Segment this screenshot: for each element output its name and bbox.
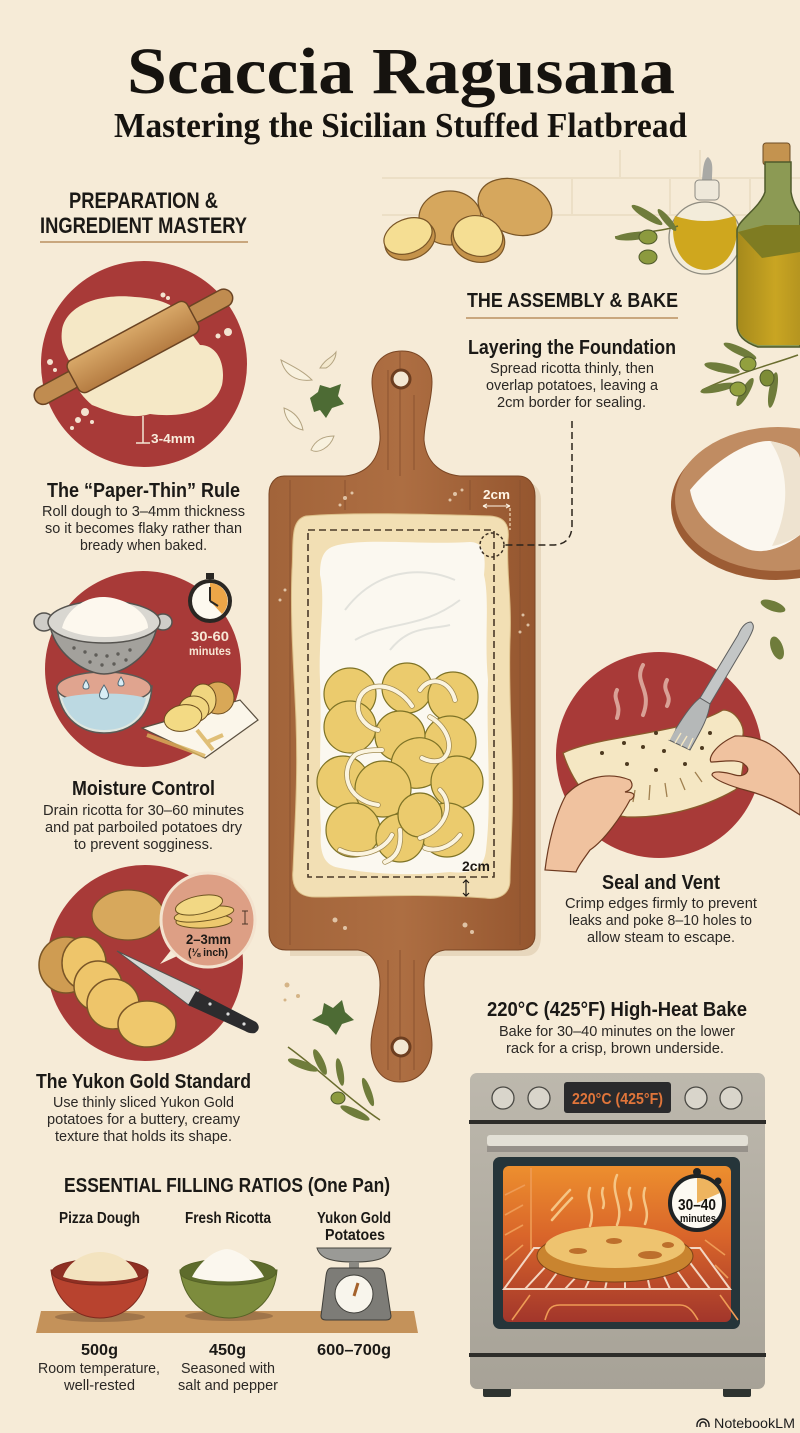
text block: yukon gold standard: Use thinly sliced Yukon Gold [53,1095,234,1111]
icon: parsley and olive sprig [284,982,380,1123]
icon: colander with ricotta [34,597,172,674]
column: pizza dough: Room temperature, [38,1361,160,1377]
icon: fallen leaves [759,597,787,661]
text block: moisture control: and pat parboiled potatoes dry [45,820,243,836]
icon: sliced potato [39,937,176,1047]
oven display: 220°C (425°F) [572,1091,663,1108]
oven handle [487,1135,748,1152]
icon: olive branch right [700,340,798,408]
text block: layering the foundation: Spread ricotta thinly, then [490,361,654,377]
icon: fresh potatoes [378,169,560,268]
heading: preparation and ingredient mastery: PREPARATION & [69,188,218,213]
dough base [291,514,512,898]
column: fresh ricotta: Fresh Ricotta [185,1210,271,1227]
icon: crimped calzone [563,710,744,817]
column: fresh ricotta [178,1210,278,1394]
panel: moisture control illustration [34,571,258,767]
column: fresh ricotta: salt and pepper [178,1378,278,1394]
icon: garlic and parsley [281,352,344,451]
column: fresh ricotta: Seasoned with [181,1361,275,1377]
text block: paper-thin rule: bready when baked. [80,538,207,554]
heading: filling ratios: ESSENTIAL FILLING RATIOS (One Pan) [64,1175,390,1197]
title: Scaccia Ragusana [127,35,675,108]
icon: potatoes on towel [142,682,258,758]
callout: slice thickness [160,873,255,967]
callout: slice thickness: (⅛ inch) [188,947,228,959]
panel: paper-thin dough illustration: 3-4mm [151,431,195,446]
icon: 30-40 minute timer [670,1168,724,1230]
column: pizza dough: Pizza Dough [59,1210,140,1227]
icon: 30-40 minute timer: minutes [680,1213,716,1225]
text block: layering the foundation: overlap potatoes, leaving a [486,378,659,394]
column: potatoes scale: Yukon Gold [317,1210,391,1227]
text block: seal and vent: leaks and poke 8–10 holes to [569,913,752,929]
flour dust [278,488,530,934]
column: pizza dough: 500g [81,1342,118,1359]
text block: moisture control [43,778,244,853]
icon: 30-40 minute timer: 30–40 [678,1197,716,1214]
dimension: bottom 2cm: 2cm [462,858,490,874]
icon: rising steam [552,1175,647,1226]
icon: olive branch upper [615,202,679,264]
text block: moisture control: to prevent sogginess. [74,837,213,853]
heading: assembly and bake: THE ASSEMBLY & BAKE [467,290,678,312]
dimension: bottom 2cm [462,858,490,896]
cutting board [269,351,535,1082]
watermark: NotebookLM: NotebookLM [714,1415,795,1431]
subtitle: Mastering the Sicilian Stuffed Flatbread [114,106,688,145]
panel: paper-thin dough illustration [27,261,247,467]
callout: slice thickness: 2–3mm [186,931,231,947]
text block: high heat bake: Bake for 30–40 minutes on the lower [499,1024,735,1040]
icon: left hand [545,776,634,872]
oven display [564,1082,671,1113]
icon: olive oil bottle [737,143,800,347]
panel: oven illustration [469,1073,766,1397]
icon: rolling pin [27,278,240,415]
text block: moisture control: Drain ricotta for 30–60 minutes [43,803,244,819]
icon: fork [669,622,753,750]
board shadow [290,482,541,956]
text block: seal and vent: allow steam to escape. [587,930,735,946]
text block: yukon gold standard: potatoes for a buttery, creamy [47,1112,241,1128]
text block: paper-thin rule: Roll dough to 3–4mm thickness [42,504,245,520]
text block: seal and vent [565,872,757,946]
text block: yukon gold standard: texture that holds its shape. [55,1129,232,1145]
tile wall backdrop [382,150,800,215]
panel: yukon gold illustration [39,865,259,1061]
column: pizza dough: well-rested [63,1378,135,1394]
heading: preparation and ingredient mastery: INGREDIENT MASTERY [40,213,247,238]
panel: essential filling ratios [36,1175,418,1394]
onion strands [340,681,460,862]
text block: seal and vent: Seal and Vent [602,872,720,894]
column: potatoes scale: Potatoes [325,1227,385,1244]
column: potatoes scale [317,1210,391,1359]
ricotta layer [320,542,489,874]
heading: preparation and ingredient mastery [40,188,248,243]
column: fresh ricotta: 450g [209,1342,246,1359]
text block: paper-thin rule: so it becomes flaky rather than [45,521,242,537]
arrow: callout leader line [503,421,572,545]
text block: paper-thin rule: The “Paper-Thin” Rule [47,480,240,502]
panel: seal and vent illustration [545,622,800,872]
icon: steam [616,665,669,718]
column: potatoes scale: 600–700g [317,1342,391,1359]
text block: seal and vent: Crimp edges firmly to prevent [565,896,757,912]
oven window [493,1157,740,1329]
dimension: top 2cm: 2cm [483,487,510,502]
panel: moisture control illustration: 30-60 [191,629,229,644]
wooden shelf [36,1311,418,1333]
icon: glass bowl [57,672,152,733]
icon: stopwatch [188,573,232,623]
icon: flour bowl [671,427,800,580]
text block: paper-thin rule [42,480,245,554]
dimension: top 2cm [483,487,510,530]
oven knobs [492,1087,742,1109]
icon: chef knife [117,951,259,1033]
text block: yukon gold standard: The Yukon Gold Standard [36,1071,251,1093]
icon: baked scaccia [537,1226,693,1282]
column: pizza dough [38,1210,160,1394]
text block: yukon gold standard [36,1071,251,1145]
panel: cutting board with scaccia [269,351,541,1082]
text block: layering the foundation: Layering the Foundation [468,337,676,359]
icon: whole potato [92,890,164,940]
icon: oil cruet [669,157,741,274]
text block: high heat bake [487,999,747,1057]
panel: moisture control illustration: minutes [189,644,231,658]
text block: layering the foundation [468,337,676,411]
text block: high heat bake: rack for a crisp, brown underside. [506,1041,724,1057]
potato slices [317,663,483,862]
dashed sealing border [308,530,504,877]
text block: moisture control: Moisture Control [72,778,215,800]
oven rack [504,1248,730,1289]
text block: high heat bake: 220°C (425°F) High-Heat Bake [487,999,747,1021]
icon: right hand [710,736,800,815]
text block: layering the foundation: 2cm border for sealing. [497,395,646,411]
